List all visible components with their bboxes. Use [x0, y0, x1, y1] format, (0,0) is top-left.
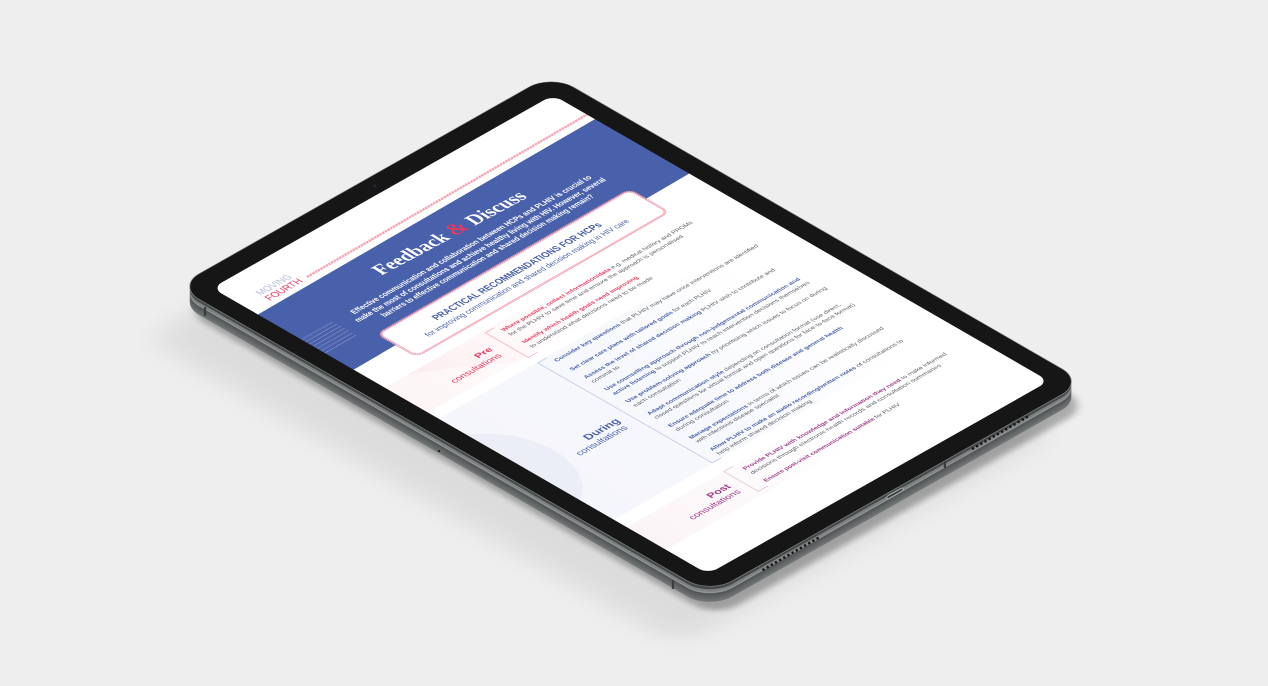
panel: pre background: [386, 334, 524, 412]
intro paragraph: Effective communication and collaboration between HCPs and PLHIV is crucial to: [348, 174, 594, 315]
logo word fourth: FOURTH: [263, 278, 306, 302]
box heading: PRACTICAL RECOMMENDATIONS FOR HCPs: [430, 221, 605, 322]
icon: microphone dot: [438, 450, 440, 452]
box subheading: for improving communication and shared decision making in HIV care: [422, 218, 632, 338]
icon: speaker grille left: [764, 538, 818, 570]
during recommendations: commit to: [590, 365, 623, 384]
during recommendations: each consultation: [632, 379, 683, 408]
section: pre consultations: [452, 222, 693, 383]
during recommendations: Allow PLHIV to make an audio recording/written notes of consultations to: [709, 339, 906, 452]
bezel: [177, 74, 1084, 594]
pre recommendations: Identify which health goals need improving: [521, 276, 641, 344]
during recommendations: closed questions for virtual format and open questions for face-to-face format): [653, 303, 857, 420]
callout: recommendations box: [378, 190, 668, 356]
during recommendations: Use problem-solving approach by prioritising which issues to focus on during: [625, 286, 829, 404]
stripes pattern: [299, 322, 356, 355]
post recommendations: Ensure post-visit communication suitable for PLHIV: [763, 403, 903, 483]
during recommendations: with infectious disease specialist: [694, 394, 782, 444]
post recommendations: decisions through electronic health records and consultation summaries: [749, 364, 944, 475]
pre label: Pre: [471, 346, 495, 359]
antenna seams: [205, 307, 945, 589]
during recommendations: Set clear care plans with tailored goals for each PLHIV: [569, 289, 714, 372]
pre recommendations: Where possible, collect information/data e.g. medical history and PROMs: [500, 221, 695, 333]
tablet side wall: [177, 77, 1084, 609]
tablet body: [177, 74, 1084, 609]
during recommendations: Consider key questions that PLHIV may have once interventions are identified: [553, 244, 761, 363]
icon: speaker grille right: [973, 417, 1027, 448]
panel: during background: [439, 340, 750, 520]
icon: front camera: [373, 184, 377, 188]
post bracket: [724, 466, 767, 491]
during label: During: [581, 417, 624, 442]
during recommendations: [552, 244, 923, 457]
section: post consultations: [690, 352, 947, 520]
post sublabel: consultations: [686, 488, 744, 521]
pre recommendations: to understand what decisions need to be made: [529, 276, 656, 349]
during recommendations: Ensure adequate time to address both disease and general health: [667, 326, 846, 428]
logo pink rule: [307, 107, 600, 277]
logo: [256, 274, 303, 300]
during recommendations: Manage expectations in terms of which issues can be realistically discussed: [688, 327, 886, 440]
intro paragraph: make the most of consultations and achieve healthy living with HIV. However, several: [351, 176, 608, 323]
pre recommendations: for the PLHIV to save time and ensure the approach is personalised: [508, 235, 686, 337]
during recommendations: help inform shared decision making: [716, 400, 814, 456]
logo word moving: MOVING: [254, 273, 295, 297]
section: during consultations: [537, 244, 903, 464]
tablet shadow: [147, 98, 1090, 646]
icon: charging port: [887, 488, 904, 499]
during recommendations: during consultation: [674, 400, 731, 432]
during recommendations: Assess the level of shared decision making PLHIV wish to contribute and: [583, 268, 777, 380]
screen page: [218, 98, 1044, 571]
intro paragraph: barriers to effective communication and shared decision making remain?: [378, 193, 597, 318]
header blue fill: [258, 119, 690, 370]
post label: Post: [704, 483, 735, 500]
post recommendations: Provide PLHIV with knowledge and information they need to make informed: [742, 352, 949, 471]
title: Feedback & Discuss: [365, 187, 532, 278]
panel: post background: [627, 501, 714, 550]
during recommendations: Use counselling approach through non-judgemental communication and: [603, 277, 803, 392]
during sublabel: consultations: [573, 424, 631, 457]
pre sublabel: consultations: [448, 352, 505, 384]
during bracket: [538, 358, 721, 463]
page background: [218, 98, 1044, 571]
during recommendations: active listening to support PLHIV to reach intervention decisions themselves: [611, 281, 812, 396]
during recommendations: Adapt communication style depending on consultation format (use direct,: [646, 303, 843, 416]
pre bracket: [485, 328, 537, 358]
